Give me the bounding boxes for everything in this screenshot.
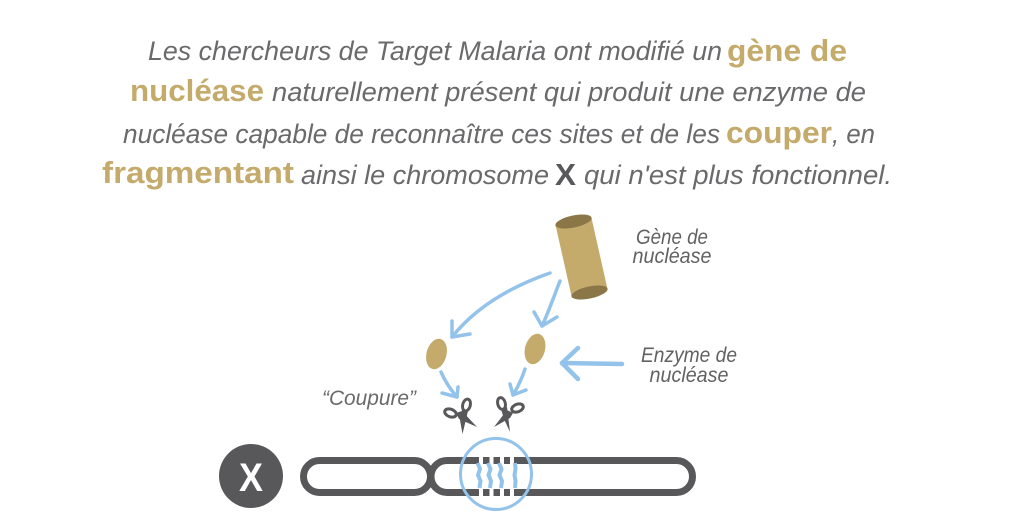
icon: gene cylinder — [554, 212, 609, 302]
heading paragraph: gène de — [727, 33, 847, 68]
label: gène de nucléase — [632, 226, 712, 268]
heading paragraph: Les chercheurs de Target Malaria ont modifié un — [148, 36, 722, 66]
heading paragraph: X — [555, 157, 576, 192]
heading paragraph: nucléase — [130, 73, 264, 108]
arrow: right enzyme to scissors — [510, 369, 526, 395]
label: enzyme de nucléase: Enzyme de — [641, 344, 737, 367]
arrow: gene to left enzyme — [452, 273, 550, 337]
label: enzyme de nucléase — [641, 344, 737, 387]
heading paragraph: qui n'est plus fonctionnel. — [584, 160, 892, 190]
label: enzyme de nucléase: nucléase — [650, 364, 728, 387]
heading paragraph: ainsi le chromosome — [301, 160, 549, 190]
heading paragraph: naturellement présent qui produit une enzyme de — [272, 77, 866, 107]
highlight circle — [460, 438, 532, 510]
label: gène de nucléase: nucléase — [632, 245, 712, 268]
icon: left enzyme — [423, 336, 450, 372]
chromosome — [304, 438, 692, 510]
heading paragraph — [102, 33, 892, 192]
left chromosome arm — [304, 460, 430, 492]
arrow: gene to right enzyme — [534, 281, 560, 326]
icon: left scissors — [444, 398, 477, 434]
icon: right enzyme — [521, 331, 549, 367]
cut sites — [478, 456, 516, 497]
icon: right scissors — [494, 397, 524, 432]
icon: X chromosome badge: X — [239, 456, 263, 500]
icon: X chromosome badge — [219, 444, 283, 508]
right chromosome arm — [431, 460, 692, 492]
heading paragraph: , en — [832, 119, 875, 149]
label: coupure: “Coupure” — [322, 387, 417, 410]
heading paragraph: couper — [726, 115, 832, 150]
arrow: left enzyme to scissors — [441, 372, 458, 397]
heading paragraph: nucléase capable de reconnaître ces sites et de les — [123, 119, 720, 149]
heading paragraph: fragmentant — [102, 155, 294, 190]
arrow: enzyme label pointer — [562, 348, 622, 379]
label: gène de nucléase: Gène de — [636, 226, 708, 249]
